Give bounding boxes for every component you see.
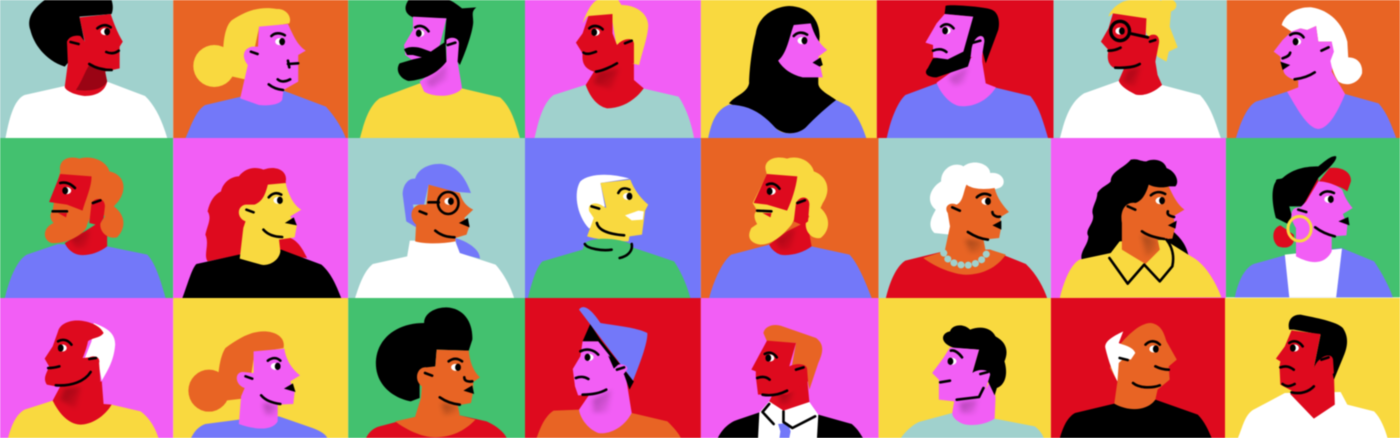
row 2, left half (0, 138, 701, 299)
portrait: man with curly black hair on yellow (879, 298, 1051, 438)
portrait: man in suit and tie on magenta (701, 298, 879, 438)
hair (218, 331, 284, 401)
face (404, 17, 446, 61)
red cap back (1314, 168, 1351, 191)
face (240, 24, 306, 105)
portrait: balding man on magenta (0, 298, 173, 438)
hair (583, 0, 648, 65)
shirt (708, 100, 867, 139)
shirt (1060, 400, 1212, 438)
hair bun (193, 45, 235, 87)
face (751, 341, 808, 395)
hair (376, 307, 472, 401)
face (415, 350, 480, 421)
neck (937, 50, 996, 106)
portrait: man with glasses and top knot on teal (1054, 0, 1227, 139)
shirt (360, 83, 520, 139)
neck (769, 378, 809, 411)
shirt (182, 250, 342, 299)
hair bun (188, 370, 229, 412)
portrait: older woman with pearl necklace on teal (879, 138, 1051, 299)
face (754, 174, 809, 225)
face (411, 185, 473, 243)
shirt (887, 83, 1048, 139)
pearl necklace (944, 251, 988, 265)
portrait: blond man on magenta (525, 0, 701, 139)
face (573, 341, 627, 395)
face (576, 14, 634, 72)
hair (406, 0, 476, 65)
shirt (355, 241, 514, 299)
portrait: man in periwinkle cap on red (525, 298, 701, 438)
face (49, 174, 105, 225)
hair (1289, 315, 1347, 380)
white top (1285, 249, 1342, 297)
shirt (901, 413, 1044, 438)
face (925, 14, 980, 59)
shirt (709, 245, 872, 299)
shirt (185, 91, 346, 139)
face (945, 185, 1009, 263)
row 1, right half (701, 0, 1400, 139)
hair (1282, 7, 1362, 84)
neck (586, 63, 644, 108)
face (778, 23, 827, 77)
portrait: red-haired woman on magenta (173, 138, 348, 299)
cap (579, 307, 647, 381)
face (239, 183, 301, 265)
face (587, 180, 648, 241)
white shirt (758, 401, 818, 438)
hair (223, 8, 290, 80)
neck (1287, 50, 1345, 129)
portrait: dark-haired woman with yellow collar on magenta (1051, 138, 1226, 298)
portrait: bearded man on red (877, 0, 1054, 139)
portrait: woman with orange bun on yellow (173, 298, 348, 438)
glasses (438, 192, 458, 214)
hair (1079, 159, 1189, 260)
hair (577, 175, 629, 229)
shirt (1236, 92, 1396, 139)
hair (1105, 331, 1135, 381)
hair and cap brim (1273, 156, 1336, 225)
neckline (395, 415, 475, 437)
shirt (1060, 81, 1221, 139)
red cap sliver (1304, 178, 1318, 205)
shirt (534, 85, 694, 139)
portrait: man with orange beard on green (0, 138, 173, 299)
face (1291, 181, 1353, 262)
hair (1108, 0, 1178, 62)
face (237, 349, 300, 429)
portrait: woman in black hijab on yellow (701, 0, 877, 139)
shirt (191, 416, 327, 438)
jacket (1235, 248, 1393, 297)
hair (29, 0, 113, 67)
shirt (8, 401, 158, 438)
portrait: man with black hair on teal (0, 0, 173, 139)
face (1101, 13, 1162, 95)
neck (769, 221, 812, 255)
portrait: woman with cap and hoop earring on green (1226, 138, 1400, 297)
hair and beard (749, 157, 828, 245)
portrait: blonde woman with bun on orange (173, 0, 348, 139)
hair (943, 325, 1007, 395)
face (1121, 185, 1184, 264)
suit (718, 412, 863, 438)
hair (583, 324, 634, 390)
glasses (1111, 21, 1129, 41)
neck (952, 376, 996, 425)
row 1, left half (0, 0, 701, 139)
turtleneck collar (583, 239, 632, 258)
portrait: blue-haired woman with glasses on teal (348, 138, 525, 299)
hair (403, 164, 480, 259)
face (45, 320, 104, 386)
collar (763, 404, 815, 428)
portrait: balding older man in black on red (1051, 298, 1225, 438)
row 2, right half (701, 138, 1400, 299)
portrait: man with yellow beard on orange (701, 138, 879, 299)
shirt (528, 246, 691, 299)
hoop earring (1288, 216, 1311, 241)
face (1274, 26, 1334, 81)
portrait: woman with big black hair on green (348, 298, 525, 438)
beard (398, 42, 446, 81)
shirt (537, 410, 681, 438)
hood (729, 6, 836, 133)
portrait: man in white shirt on yellow (1225, 298, 1400, 438)
shirt (4, 244, 166, 299)
neck (53, 381, 112, 425)
hair (763, 325, 822, 390)
hair and beard (926, 5, 999, 77)
hair and beard (45, 157, 124, 243)
shirt (1238, 392, 1388, 438)
neckline (923, 250, 1006, 275)
portrait: white-haired woman on orange (1227, 0, 1400, 139)
portrait: bearded man on green (348, 0, 525, 139)
ear (971, 36, 984, 57)
shirt (366, 415, 507, 438)
hair (85, 323, 115, 381)
face (1105, 323, 1177, 409)
hair (205, 168, 307, 261)
neck (579, 371, 632, 433)
dress (886, 250, 1047, 299)
hair (930, 163, 1004, 235)
row 3, left half (0, 298, 701, 438)
neck (65, 221, 107, 255)
neck (1290, 373, 1335, 419)
neck (420, 38, 462, 96)
portrait: older man in green turtleneck on periwinkle (525, 138, 701, 299)
tie (778, 423, 791, 438)
shirt (1060, 240, 1221, 298)
collar (1109, 240, 1173, 284)
red bun (1273, 225, 1294, 248)
shirt (5, 82, 167, 139)
face (932, 347, 990, 401)
face (1276, 330, 1334, 393)
row 3, right half (701, 298, 1400, 438)
face (65, 14, 123, 96)
